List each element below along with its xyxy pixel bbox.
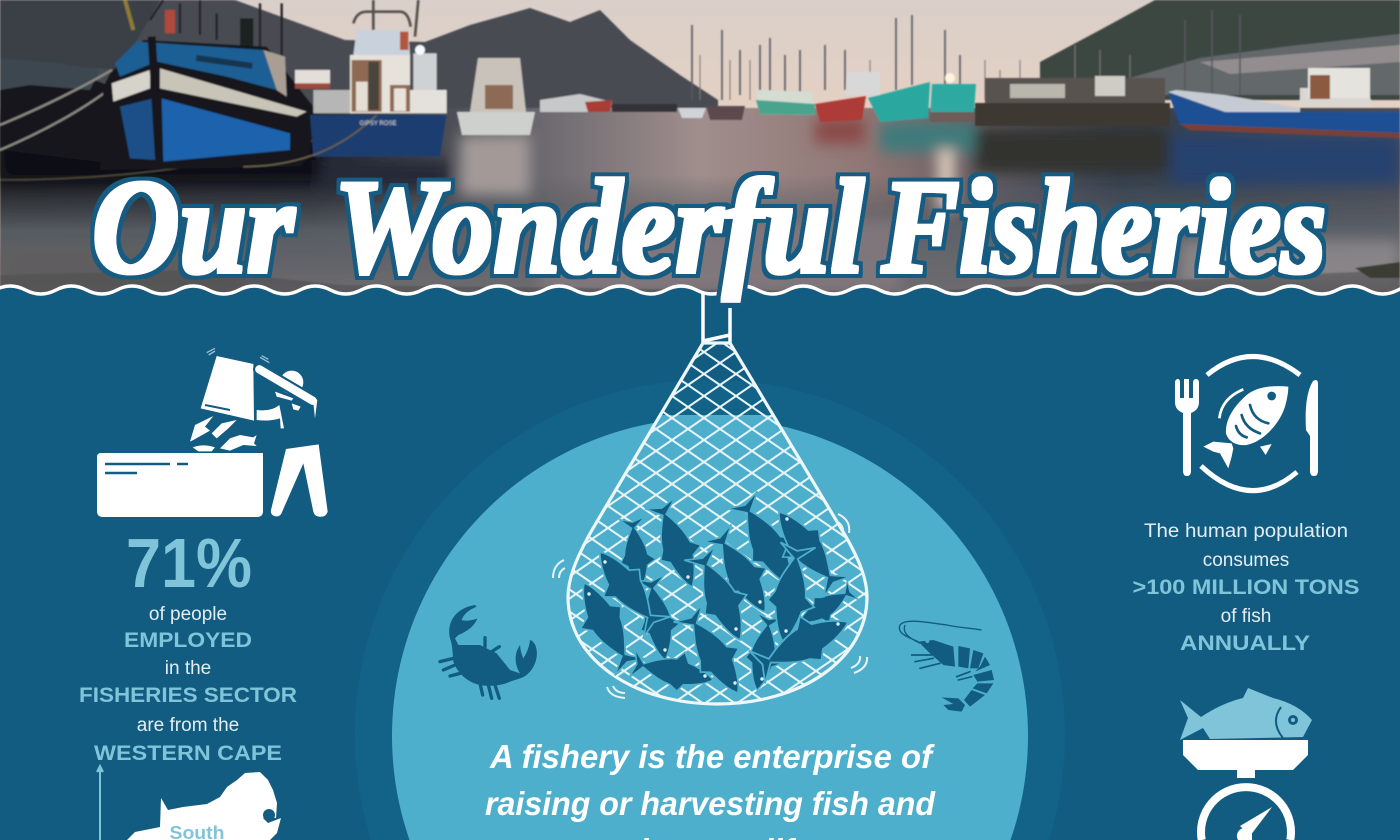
employment text block: EMPLOYED xyxy=(124,629,252,652)
consumption text block: >100 MILLION TONS xyxy=(1132,576,1360,599)
photo: fishing harbour at dusk xyxy=(0,0,1400,298)
arrow to Western Cape xyxy=(97,766,103,840)
icon: prawn xyxy=(899,621,994,712)
scale pan xyxy=(1183,740,1308,778)
hat xyxy=(280,371,303,394)
definition text xyxy=(485,738,936,840)
knife xyxy=(1306,380,1318,476)
legs xyxy=(271,444,328,517)
motion marks xyxy=(553,514,867,698)
white stripes xyxy=(112,70,150,102)
icon: net with fish xyxy=(553,292,880,710)
second boat hull xyxy=(310,115,447,157)
lower blue xyxy=(120,98,157,160)
icon: crab xyxy=(440,605,537,698)
mooring rope xyxy=(243,115,377,167)
map: South Africa xyxy=(127,772,281,840)
net outline xyxy=(568,343,867,704)
upper blue xyxy=(115,42,277,90)
icon: fisher emptying a crate xyxy=(190,348,328,517)
fish xyxy=(1203,386,1288,468)
fish eyes xyxy=(587,517,840,685)
icon: plate with fish and cutlery xyxy=(1175,356,1318,491)
employment text block: in the xyxy=(165,658,211,679)
fork xyxy=(1175,379,1199,476)
motion marks xyxy=(207,348,269,363)
crate xyxy=(201,356,254,421)
consumption text block: consumes xyxy=(1203,550,1289,571)
title: Fisheries xyxy=(881,153,1326,302)
wheelhouse rear xyxy=(263,50,287,97)
consumption text block: of fish xyxy=(1221,606,1271,627)
employment text block: WESTERN CAPE xyxy=(94,742,282,765)
fish catch xyxy=(562,488,861,704)
title xyxy=(92,153,1326,302)
employment text block: of people xyxy=(149,604,227,625)
second boat cabin xyxy=(353,30,410,55)
net mesh xyxy=(570,344,866,702)
employment text block: are from the xyxy=(137,715,239,736)
consumption text block: ANNUALLY xyxy=(1180,632,1310,655)
face and shoulder xyxy=(275,392,293,401)
colourful boats xyxy=(756,90,815,115)
wave divider and sea panel xyxy=(0,286,1400,330)
inner circle xyxy=(392,418,1028,840)
net interior tint xyxy=(658,415,776,425)
right blue boat xyxy=(1300,88,1372,106)
big blue boat and second boat xyxy=(100,0,447,170)
consumption text block: The human population xyxy=(1144,521,1348,542)
definition text: raising or harvesting fish and xyxy=(485,785,936,822)
stem post xyxy=(152,37,159,163)
torso xyxy=(257,405,284,428)
left dock xyxy=(0,58,125,165)
shore xyxy=(0,270,1400,296)
background clutter xyxy=(295,70,330,88)
plate arcs xyxy=(1201,356,1300,491)
third boat xyxy=(470,58,526,112)
icon: fish on weighing scale xyxy=(1180,688,1312,840)
stat: 71%: 71% xyxy=(126,524,252,602)
reflections xyxy=(0,115,1400,290)
falling fish xyxy=(190,416,213,442)
scale fish xyxy=(1180,688,1312,740)
title: Wonderful xyxy=(334,153,864,302)
photo: fishing harbour at dusk: GIPSY ROSE xyxy=(360,121,396,127)
employment text block: FISHERIES SECTOR xyxy=(79,684,297,707)
definition text: A fishery is the enterprise of xyxy=(489,738,935,775)
rails and rigging xyxy=(150,0,282,57)
scale dial xyxy=(1201,787,1291,840)
net handle xyxy=(703,292,730,343)
hull dark mass xyxy=(100,40,313,170)
title: Our xyxy=(92,153,295,302)
employment text block xyxy=(79,604,297,765)
arm xyxy=(259,369,313,401)
icon: cooler box xyxy=(97,453,263,517)
masts xyxy=(692,10,1240,100)
consumption text block xyxy=(1132,521,1360,655)
outer circle xyxy=(355,380,1065,840)
